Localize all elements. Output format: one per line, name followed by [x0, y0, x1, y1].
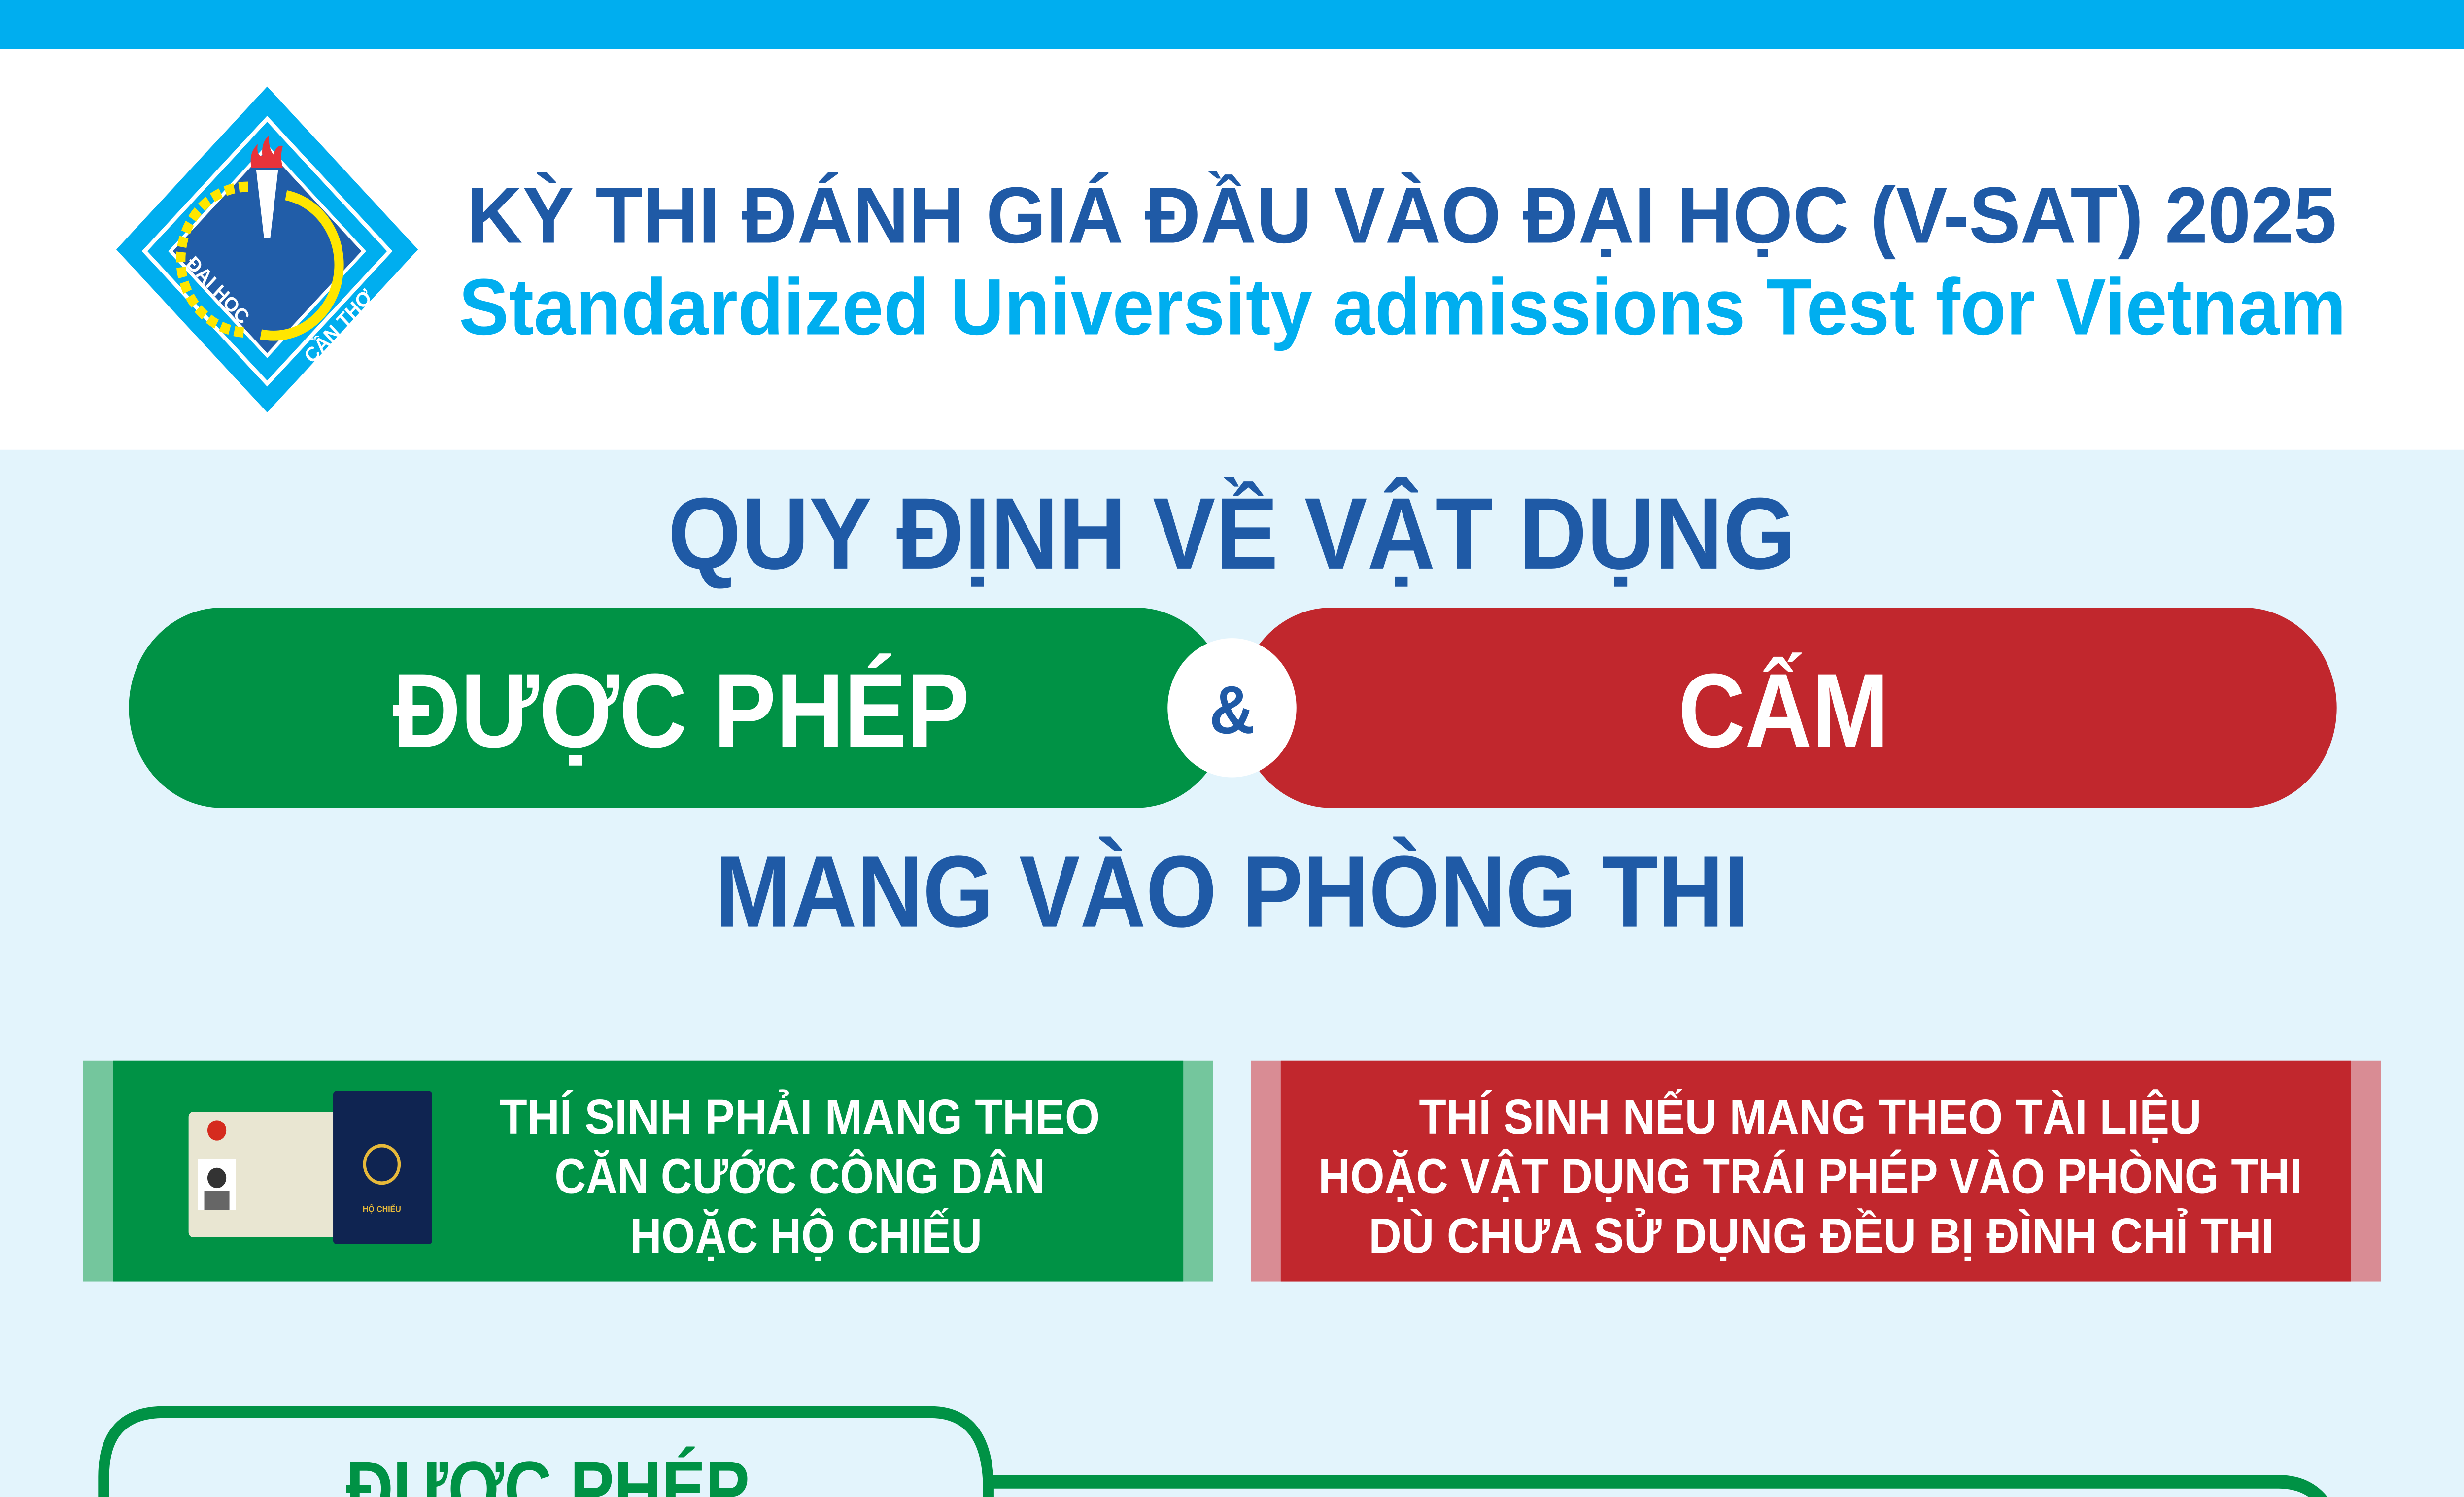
- section tab: allowed items: [103, 1412, 2329, 1497]
- panel: banned materials warning: [1251, 1061, 2381, 1282]
- icon: ampersand circle: &: [1209, 673, 1255, 748]
- title: exam name: KỲ THI ĐÁNH GIÁ ĐẦU VÀO ĐẠI HỌC (V-SAT) 2025: [467, 171, 2337, 260]
- icon: ID card and passport: HỘ CHIẾU: [363, 1204, 401, 1214]
- logo: Can Tho University: CẦN THƠ: [300, 284, 377, 368]
- logo: Can Tho University: ĐẠI HỌC: [182, 252, 253, 329]
- icon: ID card and passport: [189, 1091, 432, 1244]
- panel: banned materials warning: HOẶC VẬT DỤNG TRÁI PHÉP VÀO PHÒNG THI: [1318, 1149, 2302, 1204]
- icon: torch: [256, 170, 278, 238]
- header: top bar and white band: [0, 0, 2464, 450]
- pill: allowed: [129, 608, 1229, 808]
- heading: quy dinh ve vat dung: QUY ĐỊNH VỀ VẬT DỤNG: [668, 477, 1796, 591]
- icon: gear and wheat: [181, 187, 248, 333]
- logo: Can Tho University: [116, 87, 418, 412]
- icon: ampersand circle: [1167, 638, 1297, 778]
- panel: must bring ID: THÍ SINH PHẢI MANG THEO: [500, 1089, 1100, 1145]
- panel: must bring ID: HOẶC HỘ CHIẾU: [630, 1208, 982, 1263]
- heading: mang vao phong thi: MANG VÀO PHÒNG THI: [715, 835, 1749, 949]
- subtitle: english name: Standardized University admissions Test for Vietnam: [459, 263, 2346, 352]
- pill: banned: [1238, 608, 2337, 808]
- panel: banned materials warning: DÙ CHƯA SỬ DỤNG ĐỀU BỊ ĐÌNH CHỈ THI: [1369, 1208, 2274, 1263]
- pill: banned: CẤM: [1678, 652, 1889, 769]
- panel: must bring ID: CĂN CƯỚC CÔNG DÂN: [555, 1149, 1045, 1204]
- pill: allowed: ĐƯỢC PHÉP: [393, 652, 969, 769]
- panel: must bring ID: [83, 1061, 1213, 1282]
- panel: banned materials warning: THÍ SINH NẾU MANG THEO TÀI LIỆU: [1419, 1089, 2201, 1145]
